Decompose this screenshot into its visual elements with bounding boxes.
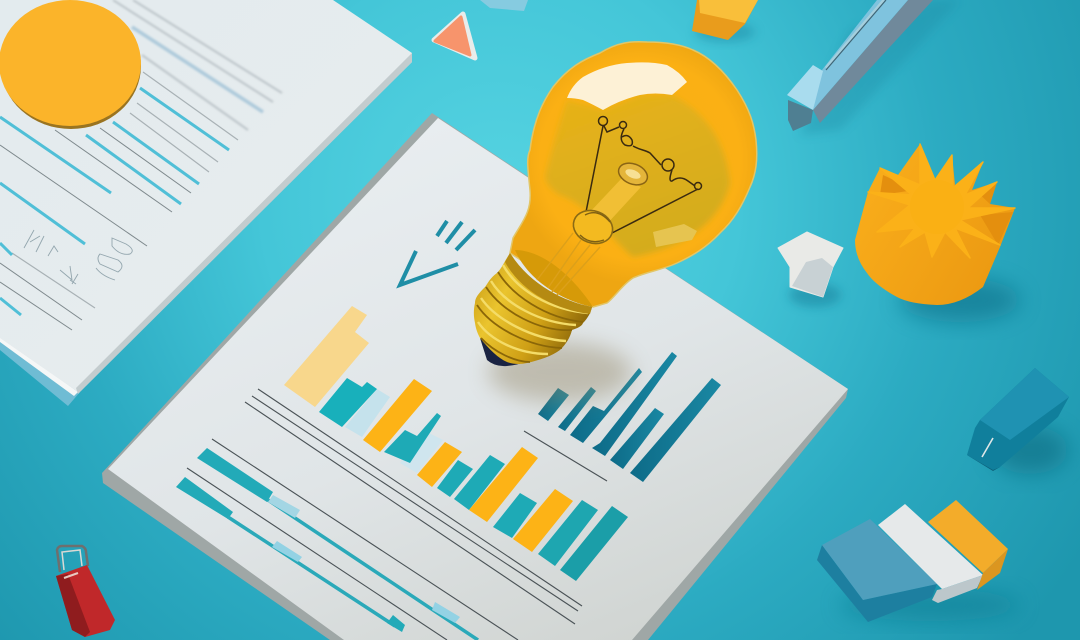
star top of gear <box>868 144 1015 258</box>
thin rule lines on left report <box>12 72 238 308</box>
icon: orange triangle <box>434 14 475 58</box>
screw base <box>474 253 592 366</box>
highlight <box>567 62 687 110</box>
panel: top-left report sheet <box>0 0 412 406</box>
bar chart: dark teal bars at right <box>538 352 721 482</box>
icon: orange disc <box>0 0 141 129</box>
line chart: teal lines at bottom <box>176 448 478 640</box>
icon: stacked blue white orange blocks <box>817 500 1020 622</box>
bar chart: main yellow and teal bars <box>284 306 628 581</box>
pale blurred lines <box>113 0 282 130</box>
icon: red clip <box>56 546 115 637</box>
icon: teal stapler <box>967 368 1069 474</box>
icon: yellow block <box>692 0 758 42</box>
opening of the base <box>515 250 593 307</box>
icon: down arrow with stripes <box>400 221 475 285</box>
icon: small top blue block <box>480 0 528 11</box>
panel: main report sheet <box>102 113 848 640</box>
filament stem <box>537 159 651 295</box>
scribbles on left report <box>24 230 132 284</box>
chart lines on left report <box>0 88 229 315</box>
icon: lightbulb <box>474 42 757 402</box>
icon: orange gear crown <box>855 144 1020 322</box>
axis lines <box>187 389 607 640</box>
icon: small white block <box>778 232 843 307</box>
filament wires <box>586 116 702 233</box>
icon: blue pen <box>787 0 960 135</box>
